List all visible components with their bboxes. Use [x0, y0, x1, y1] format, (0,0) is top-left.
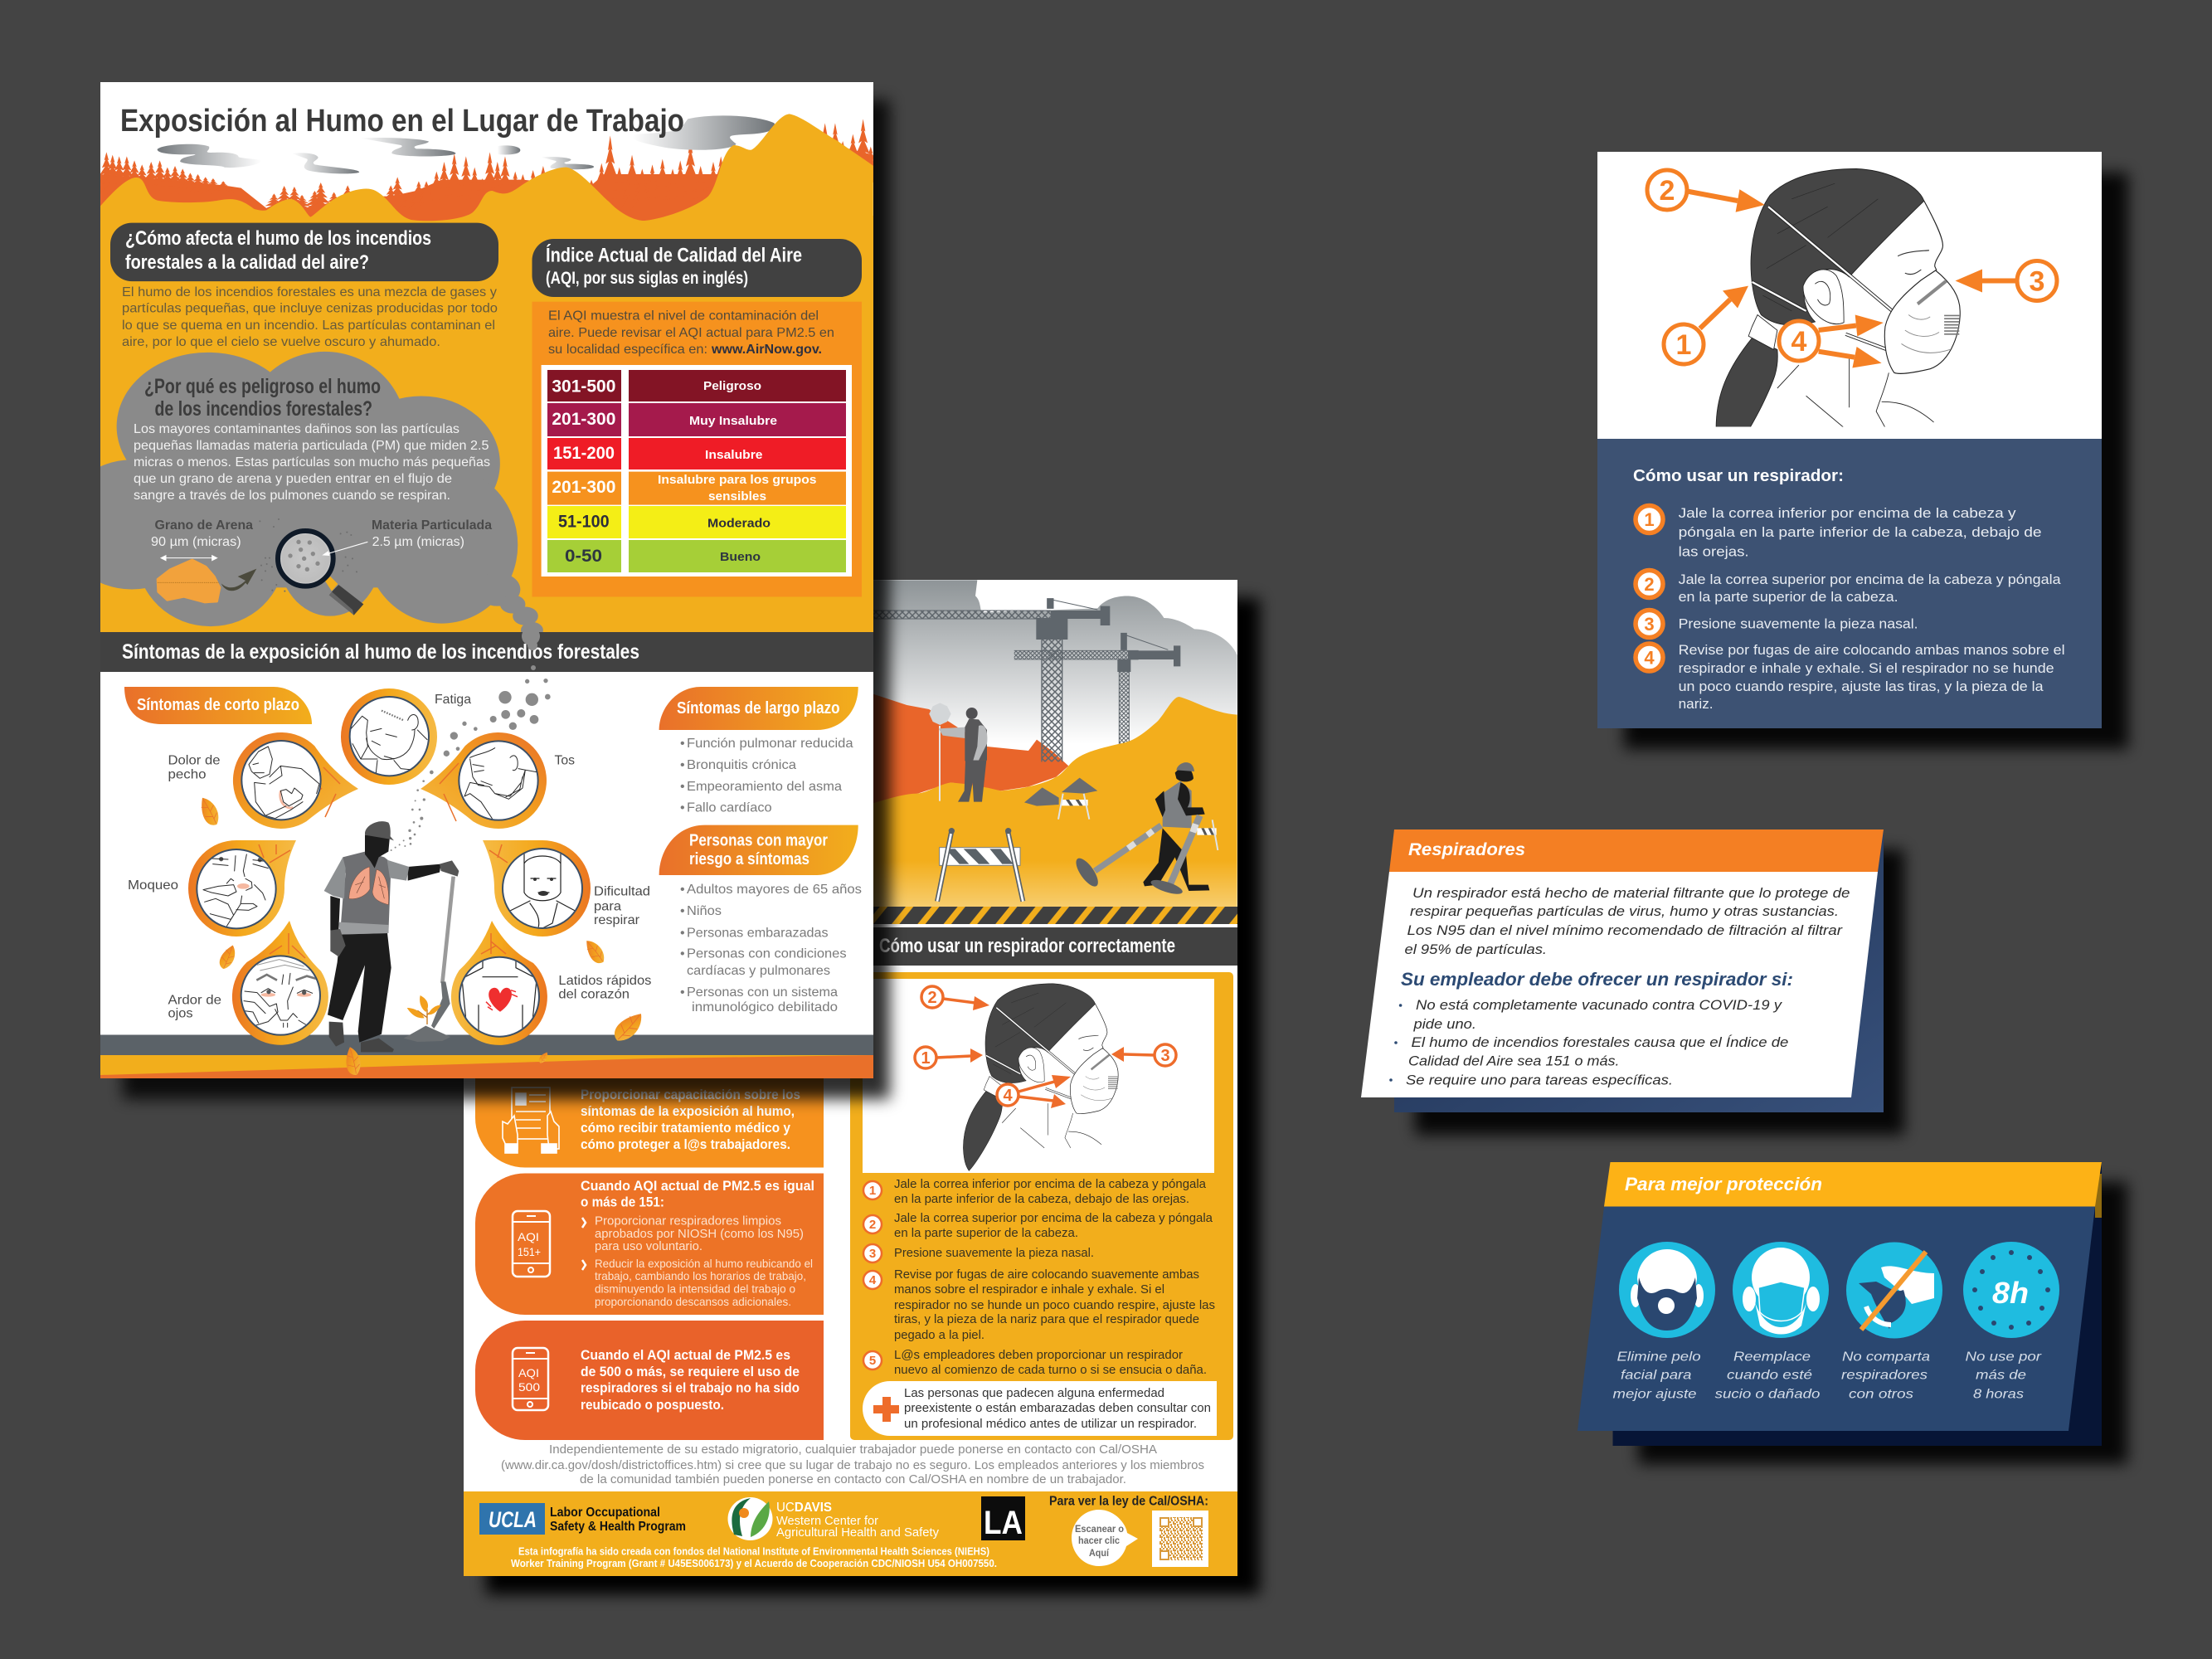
step text: Jale la correa superior por encima de la cabeza y póngala [894, 1211, 1213, 1225]
list: higher risk people: Adultos mayores de 65 años [687, 883, 862, 897]
icon: 8 hours: 8h [1992, 1276, 2029, 1310]
heading bar: symptoms: Síntomas de la exposición al humo de los incendios forestales [122, 640, 639, 664]
list: employer conditions: Calidad del Aire sea 151 o más. [1408, 1054, 1619, 1069]
callout: medical note [863, 1381, 1217, 1436]
symptom: fatigue: Fatiga [435, 693, 471, 707]
symptom: burning eyes: Ardor de [168, 994, 221, 1008]
text block: legal note: de la comunidad también pueden ponerse en contacto con Cal/OSHA en nombre de un trabajador. [580, 1472, 1126, 1486]
AQI table: Moderado [707, 516, 771, 531]
panel: training box: Proporcionar capacitación sobre los [581, 1087, 800, 1102]
panel: smoke cloud: que un grano de arena y pueden entrar en el flujo de [134, 472, 452, 486]
panel: training box: cómo recibir tratamiento médico y [581, 1121, 791, 1136]
panel: AQI 500 box: reubicado o pospuesto. [581, 1397, 724, 1413]
card shadow: respiradores [1415, 849, 1904, 1135]
illustration: mask diagram: 2 [1660, 175, 1675, 207]
list: employer conditions [1389, 998, 1788, 1088]
panel: smoke cloud: Grano de Arena [154, 518, 253, 533]
step text: tiras, y la pieza de la nariz para que el respirador quede [894, 1312, 1199, 1326]
step text: póngala en la parte inferior de la cabeza, debajo de [1679, 525, 2042, 540]
logo: UC Davis [728, 1497, 939, 1540]
panel: AQI 151 box: o más de 151: [581, 1194, 664, 1209]
hazard stripe [863, 907, 1237, 924]
step text: L@s empleadores deben proporcionar un respirador [894, 1348, 1183, 1362]
QR callout [1049, 1495, 1208, 1567]
step text: Jale la correa inferior por encima de la cabeza y póngala [894, 1177, 1207, 1191]
step text: en la parte superior de la cabeza. [894, 1226, 1078, 1240]
illustration: mask diagram: 4 [1791, 326, 1807, 358]
step badges: 2 [1644, 574, 1655, 595]
symptom: burning eyes: ojos [168, 1006, 192, 1020]
AQI table: Insalubre [705, 448, 763, 462]
illustration: worker with lungs and shovel [324, 821, 459, 1052]
step badges: 1 [1644, 509, 1655, 530]
AQI table: Muy Insalubre [689, 414, 777, 428]
step badges [1636, 506, 1663, 671]
heading: higher risk people [659, 825, 858, 875]
text block: smoke description: lo que se quema en un incendio. Las partículas contaminan el [122, 319, 495, 333]
list: long term symptoms: • [680, 801, 685, 815]
panel: poster page 2 shadow [486, 598, 1260, 1594]
logo: UC Davis: Agricultural Health and Safety [776, 1525, 939, 1540]
heading: higher risk people: Personas con mayor [689, 832, 828, 850]
step text: en la parte superior de la cabeza. [1679, 590, 1898, 605]
panel: smoke cloud: Los mayores contaminantes dañinos son las partículas [134, 422, 459, 436]
icon: do not share [1846, 1243, 1942, 1339]
illustration: small mask diagram: 3 [1160, 1047, 1170, 1065]
icon: phone AQI 151+ [513, 1211, 550, 1277]
heading: higher risk people: riesgo a síntomas [689, 850, 809, 868]
list: long term symptoms: • [680, 758, 685, 772]
symptom: runny nose: Moqueo [128, 878, 178, 893]
panel: AQI 151 box [475, 1173, 824, 1315]
symptom: fast heartbeat: del corazón [558, 988, 630, 1002]
icon labels: respiradores [1841, 1369, 1928, 1383]
smoke particles [391, 679, 551, 851]
list: long term symptoms [680, 737, 853, 815]
heading pill: AQI: (AQI, por sus siglas en inglés) [546, 269, 748, 288]
step text: pegado a la piel. [894, 1328, 984, 1342]
step number badges [863, 1181, 882, 1370]
list: higher risk people: • [680, 883, 685, 897]
panel: AQI 151 box: trabajo, cambiando los horarios de trabajo, [595, 1269, 806, 1282]
logo: UCLA: UCLA [489, 1507, 537, 1532]
panel: smoke cloud: Materia Particulada [372, 518, 492, 533]
list: long term symptoms: Bronquitis crónica [687, 758, 796, 772]
AQI table: 201-300 [552, 410, 615, 429]
panel: AQI 500 box: respiradores si el trabajo no ha sido [581, 1380, 800, 1395]
symptom: fast heartbeat [451, 921, 651, 1045]
AQI table: 0-50 [565, 547, 602, 566]
symptom: chest pain: Dolor de [168, 753, 221, 767]
text block: respirator definition: Un respirador está hecho de material filtrante que lo protege de [1412, 886, 1850, 901]
step text: nariz. [1679, 697, 1714, 712]
text block: respirator definition [1405, 886, 1850, 957]
icon: phone AQI 500 [513, 1348, 548, 1410]
symptom: cough: Tos [554, 753, 575, 767]
symptom: fast heartbeat: Latidos rápidos [558, 974, 651, 988]
icon labels: Reemplace [1733, 1350, 1811, 1365]
text block: smoke description: partículas pequeñas, que incluye cenizas producidas por todo [122, 302, 498, 316]
callout: medical note: Las personas que padecen alguna enfermedad [904, 1386, 1164, 1400]
step text: Revise por fugas de aire colocando ambas manos sobre el [1679, 643, 2065, 658]
text block: funding [511, 1546, 997, 1569]
symptom: difficulty breathing: respirar [594, 913, 640, 927]
panel: smoke cloud: 90 µm (micras) [151, 535, 241, 549]
text block: legal note: (www.dir.ca.gov/dosh/districtoffices.htm) si cree que su lugar de trabajo no es seguro. Los empleados anteriores y los miembros [501, 1458, 1204, 1472]
step text: manos sobre el respirador e inhale y exhale. Si el [894, 1282, 1164, 1297]
icon labels: Elimine pelo [1617, 1350, 1701, 1365]
QR callout: Escanear o [1075, 1525, 1124, 1535]
step text: Jale la correa inferior por encima de la cabeza y [1679, 506, 2016, 521]
step text: un poco cuando respire, ajuste las tiras, y la pieza de la [1679, 679, 2044, 694]
icon labels: No comparta [1842, 1350, 1930, 1365]
AQI table: Bueno [720, 550, 761, 564]
QR callout: Para ver la ley de Cal/OSHA: [1049, 1495, 1208, 1508]
heading pill: air quality: forestales a la calidad del aire? [125, 251, 369, 274]
panel: AQI table box: aire. Puede revisar el AQI actual para PM2.5 en [548, 326, 834, 340]
panel: AQI 151 box: Cuando AQI actual de PM2.5 es igual [581, 1179, 814, 1194]
panel: how to use a respirator card [1597, 152, 2102, 728]
text block: funding: Esta infografía ha sido creada con fondos del National Institute of Environmental Health Sciences (NIEHS) [518, 1546, 989, 1558]
symptom: cough [421, 732, 575, 829]
AQI table: Insalubre para los grupos [658, 473, 816, 487]
panel: Para mejor protección card [1578, 1162, 2102, 1446]
panel: AQI table box: su localidad específica en: [548, 343, 707, 357]
logo: UCLA: Safety & Health Program [550, 1520, 686, 1534]
panel: AQI 151 box: para uso voluntario. [595, 1239, 702, 1253]
panel: AQI table box: El AQI muestra el nivel de contaminación del [548, 309, 819, 324]
logo: UC Davis: UCDAVIS [776, 1501, 832, 1515]
symptom: difficulty breathing: Dificultad [594, 885, 650, 899]
list: long term symptoms: Empeoramiento del asma [687, 780, 842, 794]
panel: respirator steps [850, 972, 1233, 1440]
large barricade [937, 828, 1023, 902]
panel: smoke cloud: sangre a través de los pulmones cuando se respiran. [134, 489, 450, 503]
list: long term symptoms: Fallo cardíaco [687, 801, 772, 815]
icon: phone AQI 500: 500 [518, 1380, 540, 1394]
heading: long term symptoms [659, 687, 858, 730]
panel: smoke cloud: ¿Por qué es peligroso el humo [144, 375, 381, 398]
panel: training box: síntomas de la exposición al humo, [581, 1104, 795, 1119]
list: higher risk people: Personas embarazadas [687, 927, 829, 941]
illustration: burning mountains banner [95, 114, 882, 226]
list: higher risk people: Personas con un sistema [687, 985, 838, 1000]
panel: smoke cloud: 2.5 µm (micras) [372, 535, 464, 549]
panel: AQI 500 box: de 500 o más, se requiere el uso de [581, 1364, 800, 1379]
panel: Respiradores card: Respiradores [1408, 840, 1525, 859]
list: long term symptoms: • [680, 780, 685, 794]
panel: AQI table box: www.AirNow.gov. [711, 343, 822, 357]
list: long term symptoms: • [680, 737, 685, 751]
callout: medical note: un profesional médico antes de utilizar un respirador. [904, 1417, 1197, 1431]
text block: smoke description: aire, por lo que el cielo se vuelve oscuro y ahumado. [122, 335, 440, 349]
QR callout: Aquí [1089, 1549, 1110, 1559]
heading pill: AQI: Índice Actual de Calidad del Aire [546, 243, 802, 266]
illustration: small mask diagram: 1 [921, 1049, 931, 1068]
icon labels: facial para [1621, 1369, 1692, 1383]
logo: LA: LA [984, 1505, 1023, 1541]
heading: employer duty: Su empleador debe ofrecer un respirador si: [1401, 969, 1793, 990]
icon labels: No use por [1966, 1350, 2042, 1365]
panel: poster page 2 [464, 580, 1237, 1576]
QR callout: hacer clic [1078, 1536, 1121, 1546]
heading pill: air quality: ¿Cómo afecta el humo de los incendios [125, 227, 431, 250]
logo: UCLA [479, 1503, 686, 1535]
panel: smoke cloud: micras o menos. Estas partículas son mucho más pequeñas [134, 455, 490, 469]
icon: 8 hours [1963, 1242, 2059, 1338]
panel: AQI 500 box [475, 1321, 824, 1440]
symptom: chest pain [168, 732, 358, 829]
list: higher risk people: Personas con condiciones [687, 947, 847, 961]
illustration: construction site scene [860, 580, 1237, 907]
step text: respirador e inhale y exhale. Si el respirador no se hunde [1679, 661, 2054, 676]
step text: nuevo al comienzo de cada turno o si se ensucia o daña. [894, 1363, 1207, 1377]
panel: training box: cómo proteger a l@s trabajadores. [581, 1137, 790, 1152]
illustration: mask diagram [1646, 168, 2059, 426]
icon: phone AQI 151+: 151+ [518, 1245, 541, 1258]
panel: AQI 151 box: Proporcionar respiradores limpios [595, 1214, 781, 1228]
panel: Para mejor protección card: Para mejor protección [1625, 1174, 1822, 1194]
illustration: small mask diagram [915, 984, 1176, 1170]
ground band [100, 1035, 873, 1078]
card shadow: protection [1638, 1182, 2127, 1464]
list: higher risk people: Niños [687, 904, 722, 918]
panel: AQI 151 box: disminuyendo la intensidad del trabajo o [595, 1282, 795, 1296]
panel: AQI 151 box: aprobados por NIOSH (como los N95) [595, 1227, 804, 1241]
list: long term symptoms: Función pulmonar reducida [687, 737, 853, 751]
icon: remove facial hair [1619, 1242, 1715, 1338]
panel: Respiradores card [1361, 830, 1884, 1112]
step text: las orejas. [1679, 544, 1749, 559]
AQI table: sensibles [708, 489, 766, 504]
text block: legal note [501, 1443, 1204, 1486]
AQI table [542, 365, 852, 577]
text block: respirator definition: Los N95 dan el nivel mínimo recomendado de filtración al filtrar [1407, 923, 1844, 938]
symptom: difficulty breathing [483, 840, 650, 937]
AQI table: 151-200 [553, 444, 615, 463]
list: higher risk people: cardíacas y pulmonares [687, 964, 830, 978]
AQI table: 201-300 [552, 478, 615, 497]
decorative autumn leaves [196, 795, 648, 1077]
heading: long term symptoms: Síntomas de largo plazo [677, 699, 840, 718]
panel: smoke cloud: de los incendios forestales? [154, 397, 372, 421]
text block: respirator definition: el 95% de partículas. [1405, 942, 1547, 957]
panel: poster page 1 shadow [123, 100, 890, 1099]
worker carrying barricade poles [1072, 762, 1218, 897]
panel: AQI 151 box: Reducir la exposición al humo reubicando el [595, 1257, 813, 1270]
icon: phone AQI 500: AQI [518, 1366, 539, 1379]
card shadow: how to use [1624, 173, 2128, 749]
list: employer conditions: pide uno. [1412, 1017, 1476, 1032]
AQI table: Peligroso [703, 379, 761, 393]
symptom: fatigue [341, 688, 471, 785]
icon: phone AQI 151+: AQI [518, 1230, 539, 1243]
step text: Jale la correa superior por encima de la cabeza y póngala [1679, 572, 2061, 587]
text block: funding: Worker Training Program (Grant # U45ES006173) y el Acuerdo de Cooperación CDC/NIOSH U54 OH007550. [511, 1558, 997, 1569]
icon: magnifier [278, 531, 367, 615]
text block: respirator definition: respirar pequeñas partículas de virus, humo y otras sustancias. [1410, 904, 1839, 919]
list: higher risk people [680, 883, 862, 1014]
logo: UCLA: Labor Occupational [550, 1506, 660, 1520]
icon labels: cuando esté [1727, 1369, 1812, 1383]
panel: smoke cloud: pequeñas llamadas materia particulada (PM) que miden 2.5 [134, 439, 489, 453]
illustration: small mask diagram: 2 [927, 989, 937, 1007]
step text: Presione suavemente la pieza nasal. [1679, 617, 1918, 632]
step text: en la parte inferior de la cabeza, debajo de las orejas. [894, 1192, 1189, 1206]
list: employer conditions: No está completamente vacunado contra COVID-19 y [1416, 998, 1783, 1013]
heading bar: Cómo usar un respirador correctamente [464, 927, 1237, 966]
text block: legal note: Independientemente de su estado migratorio, cualquier trabajador puede ponerse en contacto con Cal/OSHA [549, 1443, 1157, 1457]
AQI table: 51-100 [558, 513, 610, 531]
callout: medical note: preexistente o están embarazadas deben consultar con [904, 1401, 1211, 1415]
worker with stop sign [929, 703, 987, 802]
list: higher risk people: • [680, 947, 685, 961]
icon: document and hands [503, 1087, 559, 1153]
step number badges: 2 [869, 1218, 876, 1232]
heading pill: AQI [532, 239, 862, 297]
step text [894, 1177, 1215, 1377]
step text: respirador no se hunde un poco cuando respire, ajuste las [894, 1298, 1215, 1312]
heading: short term symptoms: Síntomas de corto plazo [137, 696, 299, 714]
list: employer conditions: Se require uno para tareas específicas. [1406, 1073, 1673, 1088]
heading: Cómo usar un respirador: Cómo usar un respirador: [1633, 467, 1844, 485]
list: higher risk people: • [680, 904, 685, 918]
panel: AQI 500 box: Cuando el AQI actual de PM2.5 es [581, 1347, 790, 1363]
icon labels: con otros [1849, 1388, 1913, 1402]
panel: AQI table box [532, 302, 862, 597]
text block: smoke description: El humo de los incendios forestales es una mezcla de gases y [122, 285, 497, 299]
small barricade [1058, 794, 1089, 820]
step number badges: 5 [869, 1354, 876, 1368]
icon: sand grain and arrow [158, 518, 357, 602]
list: higher risk people: inmunológico debilitado [692, 1000, 838, 1014]
logo: UC Davis: Western Center for [776, 1514, 878, 1528]
title: Exposición al Humo en el Lugar de Trabajo [120, 104, 684, 139]
illustration: mask diagram: 3 [2030, 265, 2044, 297]
symptom: runny nose [128, 840, 296, 937]
list: higher risk people: • [680, 985, 685, 1000]
icon labels: mejor ajuste [1612, 1388, 1697, 1402]
symptom: difficulty breathing: para [594, 899, 621, 914]
list: employer conditions: El humo de incendios forestales causa que el Índice de [1412, 1034, 1788, 1050]
step number badges: 1 [869, 1184, 876, 1198]
panel: training box [475, 1066, 824, 1168]
panel: AQI 151 box: proporcionando descansos adicionales. [595, 1295, 791, 1308]
heading bar: Cómo usar un respirador correctamente: Cómo usar un respirador correctamente [879, 935, 1175, 957]
step text: Presione suavemente la pieza nasal. [894, 1246, 1094, 1260]
text block: smoke description [122, 285, 498, 349]
icon: QR code [1152, 1511, 1208, 1567]
illustration: small mask diagram: 4 [1003, 1087, 1013, 1105]
step number badges: 3 [869, 1247, 876, 1261]
step badges: 3 [1644, 614, 1655, 635]
icon: replace respirator [1733, 1242, 1829, 1338]
panel: poster page 1 [61, 82, 882, 1078]
illustration: mask diagram: 1 [1676, 329, 1691, 361]
footer [464, 1491, 1237, 1576]
icon labels: sucio o dañado [1715, 1388, 1821, 1402]
heading: short term symptoms [124, 687, 312, 724]
list: higher risk people: • [680, 927, 685, 941]
step text [1679, 506, 2065, 712]
heading bar: symptoms [100, 627, 873, 672]
step number badges: 4 [869, 1273, 877, 1287]
step badges: 4 [1644, 647, 1655, 669]
icon labels: más de [1976, 1369, 2026, 1383]
step text: Revise por fugas de aire colocando suavemente ambas [894, 1267, 1199, 1282]
AQI table: 301-500 [552, 377, 615, 397]
symptom: chest pain: pecho [168, 768, 207, 782]
panel: smoke cloud [100, 352, 543, 632]
icon labels [1612, 1350, 2042, 1402]
icon labels: 8 horas [1973, 1388, 2024, 1402]
symptom: burning eyes [168, 921, 328, 1045]
heading pill: air quality [110, 223, 498, 281]
